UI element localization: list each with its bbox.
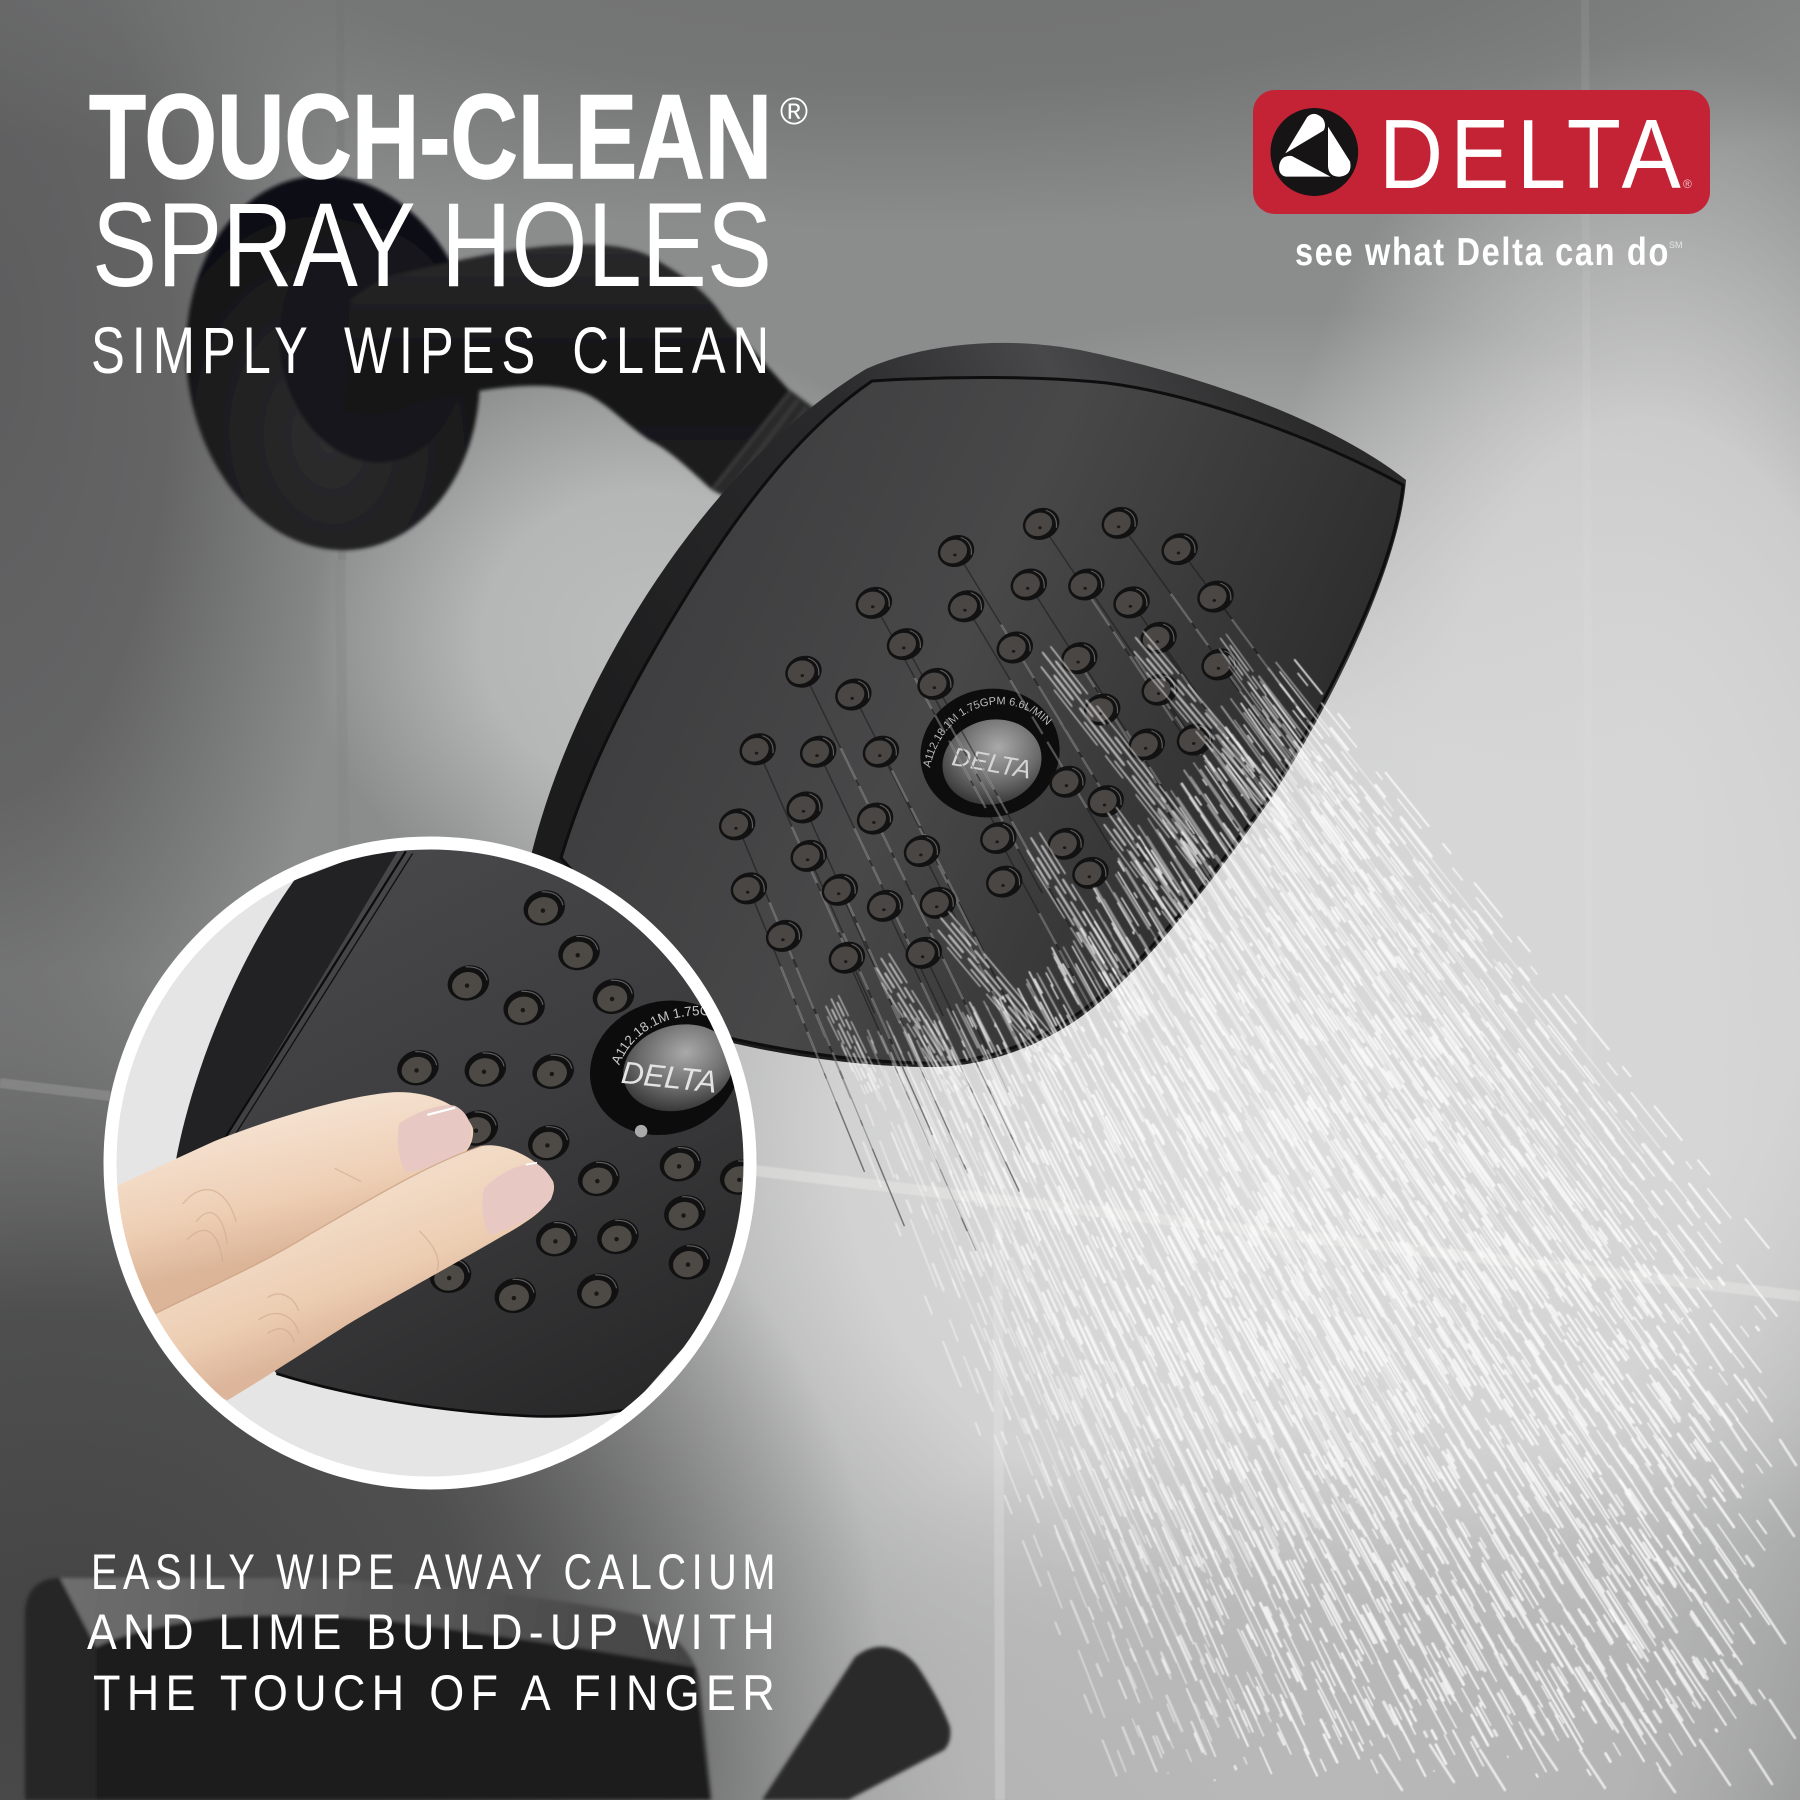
valve handle (762, 1647, 950, 1800)
body copy: wipe away calcium (87, 1544, 781, 1721)
long streams leaving the head (829, 662, 1663, 1612)
center Delta emblem (920, 688, 1060, 818)
arm (345, 245, 800, 490)
jets crossing the head face (821, 632, 1344, 1094)
inset white ring (110, 843, 750, 1483)
logo triangle emblem (1270, 108, 1358, 196)
inset Delta emblem (590, 1000, 734, 1138)
tagline: see what Delta can do (1295, 231, 1670, 274)
service mark: SM (1669, 240, 1682, 250)
heading: Spray Holes: SPRAY HOLES (92, 178, 772, 312)
logo registered mark: ® (1683, 177, 1692, 191)
inset nozzles (393, 886, 765, 1318)
inset circle: fingers wiping spray holes (104, 836, 756, 1490)
body copy: wipe away calcium: AND LIME BUILD-UP WITH (87, 1604, 781, 1660)
upper finger (107, 1092, 473, 1324)
threaded connector (712, 390, 830, 520)
shower arm and wall flange (162, 157, 830, 569)
bright spray clusters (1106, 953, 1764, 1750)
radial spray streaks (778, 660, 1779, 1781)
registered mark: ® (780, 91, 808, 133)
water trails from the nozzles (742, 536, 1314, 1251)
shower head (532, 342, 1406, 1251)
Delta logo (1253, 90, 1710, 214)
center Delta emblem: DELTA (950, 741, 1034, 785)
logo wordmark: DELTA (1379, 99, 1688, 209)
body copy: wipe away calcium: EASILY WIPE AWAY CALCIUM (91, 1544, 781, 1600)
trim outer (25, 1578, 712, 1800)
inset head rim (176, 851, 398, 1159)
inset Delta emblem: DELTA (620, 1055, 719, 1100)
trim inner plate (96, 1615, 710, 1800)
inset head face (228, 850, 744, 1416)
head face (561, 377, 1403, 1063)
inset contents (116, 850, 744, 1476)
logo red badge (1253, 90, 1710, 214)
corner spray streaks (1380, 1320, 1796, 1792)
subheading: Simply wipes clean: SIMPLY WIPES CLEAN (91, 313, 776, 387)
center Delta emblem: A112.18.1M 1.75GPM 6.6L/MIN (923, 696, 1052, 768)
trim left edge (25, 1578, 96, 1800)
flange (162, 157, 504, 569)
title: Touch-Clean: TOUCH-CLEAN (89, 70, 772, 204)
tub spout valve trim plate (25, 1578, 950, 1800)
body copy: wipe away calcium: THE TOUCH OF A FINGER (93, 1665, 781, 1721)
spray nozzles (712, 501, 1245, 979)
head body rim (530, 343, 1406, 1067)
water spray (778, 632, 1796, 1792)
lower finger (134, 1145, 554, 1400)
inset Delta emblem: A112.18.1M 1.75GPM (612, 1006, 706, 1066)
